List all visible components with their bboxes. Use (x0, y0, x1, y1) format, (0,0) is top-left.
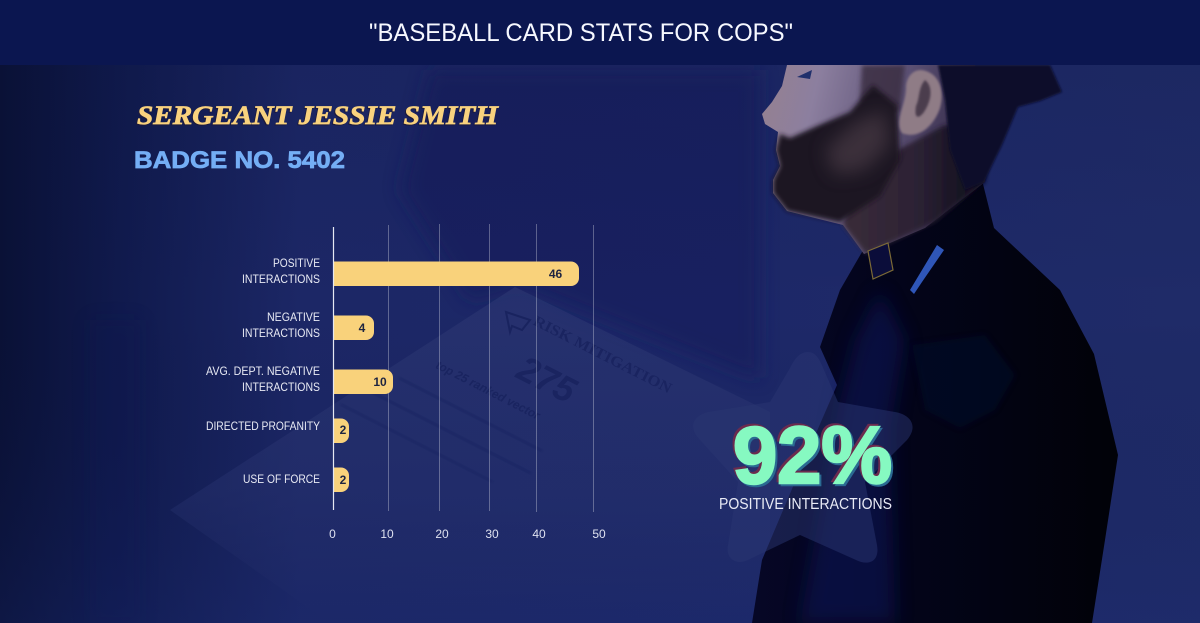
background document: 275 (510, 347, 584, 412)
bar values: 4 (359, 321, 366, 335)
ear inner (915, 80, 931, 117)
officer name: SERGEANT JESSIE SMITH (137, 101, 499, 130)
y axis (332, 227, 334, 510)
bar values: 2 (340, 423, 347, 437)
x axis labels: 30 (485, 527, 499, 541)
x axis labels: 20 (435, 527, 449, 541)
category labels: AVG. DEPT. NEGATIVE (206, 364, 320, 378)
eye (797, 70, 812, 79)
background document: top 25 ranked vector (434, 358, 544, 423)
badge number: BADGE NO. 5402 (134, 147, 345, 174)
bar values: 46 (549, 267, 562, 281)
category labels: NEGATIVE (267, 310, 320, 324)
header bar (0, 0, 1200, 65)
category labels: INTERACTIONS (242, 326, 320, 340)
x axis labels: 0 (329, 527, 336, 541)
percent caption: POSITIVE INTERACTIONS (719, 496, 892, 513)
cap and back of head (938, 65, 1062, 190)
background document (170, 253, 770, 623)
collar pin (868, 243, 893, 279)
chart grid lines (388, 224, 594, 512)
title: "BASEBALL CARD STATS FOR COPS" (369, 19, 793, 47)
category labels: POSITIVE (273, 256, 320, 270)
document logo (506, 312, 530, 332)
x axis labels: 10 (380, 527, 394, 541)
background document: RISK MITIGATION (530, 313, 674, 397)
police officer photo (752, 65, 1118, 623)
bar chart (206, 224, 606, 541)
beard highlight (825, 110, 890, 175)
category labels (206, 256, 320, 486)
head skin (762, 65, 990, 254)
shoulder patch (912, 335, 1015, 428)
bar values: 2 (340, 473, 347, 487)
category labels: INTERACTIONS (242, 272, 320, 286)
x axis labels: 40 (532, 527, 546, 541)
x axis labels (329, 527, 606, 541)
stat: 92 percent (719, 411, 892, 513)
percent value: 92% (733, 411, 892, 501)
category labels: DIRECTED PROFANITY (206, 419, 320, 433)
sideburn stubble (860, 65, 905, 120)
ear (899, 70, 942, 135)
bar values (340, 267, 562, 487)
category labels: INTERACTIONS (242, 380, 320, 394)
bars (333, 262, 579, 492)
x axis labels: 50 (592, 527, 606, 541)
category labels: USE OF FORCE (243, 472, 320, 486)
beard (773, 85, 900, 222)
star badge behind stat (693, 352, 913, 563)
neck skin (843, 125, 990, 254)
epaulette strap (910, 245, 944, 294)
bar values: 10 (373, 375, 387, 389)
officer body (752, 180, 1118, 623)
uniform chest light (800, 290, 905, 623)
